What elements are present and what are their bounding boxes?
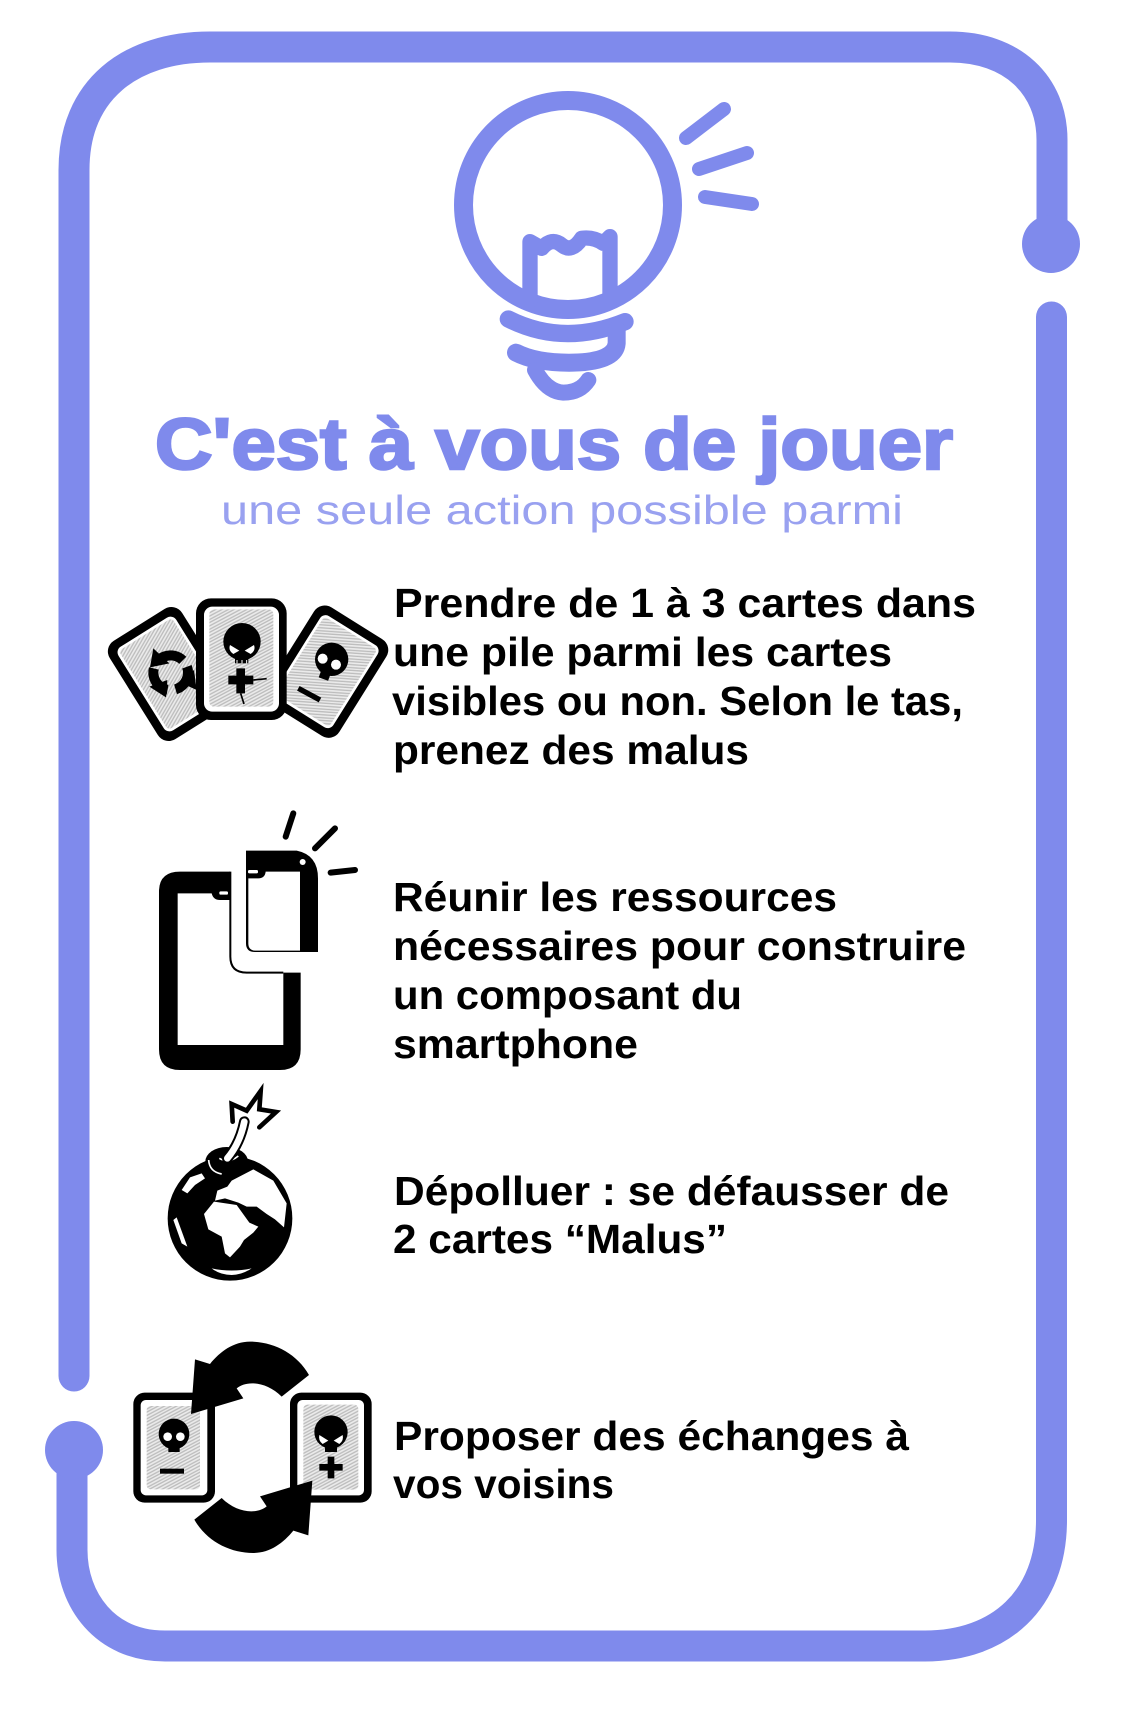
- arrow: top: [191, 1342, 309, 1414]
- frame: upper stroke with right knob: [74, 47, 1080, 1376]
- text: take cards: une pile parmi les cartes: [393, 629, 892, 675]
- icon: light bulb: [464, 100, 752, 393]
- text: build component: Réunir les ressources: [393, 874, 837, 920]
- text: build component: [393, 874, 966, 1067]
- text: propose exchanges: vos voisins: [393, 1461, 614, 1507]
- text: depollute: [393, 1168, 949, 1262]
- title: C'est à vous de jouer: [155, 405, 953, 485]
- text: build component: smartphone: [393, 1021, 638, 1067]
- subtitle: une seule action possible parmi: [221, 487, 903, 533]
- right card: [290, 1393, 372, 1503]
- text: build component: nécessaires pour construire: [393, 923, 966, 969]
- text: depollute: Dépolluer : se défausser de: [394, 1168, 949, 1214]
- text: take cards: [392, 580, 976, 773]
- arrow: bottom: [194, 1481, 312, 1553]
- text: take cards: visibles ou non. Selon le tas,: [392, 678, 963, 724]
- left card: recycle: [103, 602, 237, 746]
- right card: skull minus: [260, 601, 393, 743]
- text: propose exchanges: Proposer des échanges à: [394, 1413, 909, 1459]
- text: build component: un composant du: [393, 972, 742, 1018]
- icon: three cards: [103, 598, 393, 746]
- text: depollute: 2 cartes “Malus”: [393, 1216, 727, 1262]
- text: take cards: Prendre de 1 à 3 cartes dans: [394, 580, 976, 626]
- icon: earth bomb: [168, 1091, 292, 1281]
- middle card: skull plus: [196, 598, 287, 720]
- text: take cards: prenez des malus: [393, 727, 749, 773]
- text: propose exchanges: [393, 1413, 909, 1507]
- icon: smartphone and component: [159, 813, 355, 1070]
- frame: lower stroke with left knob: [45, 317, 1052, 1646]
- left card: [133, 1393, 215, 1503]
- icon: card exchange: [133, 1342, 372, 1553]
